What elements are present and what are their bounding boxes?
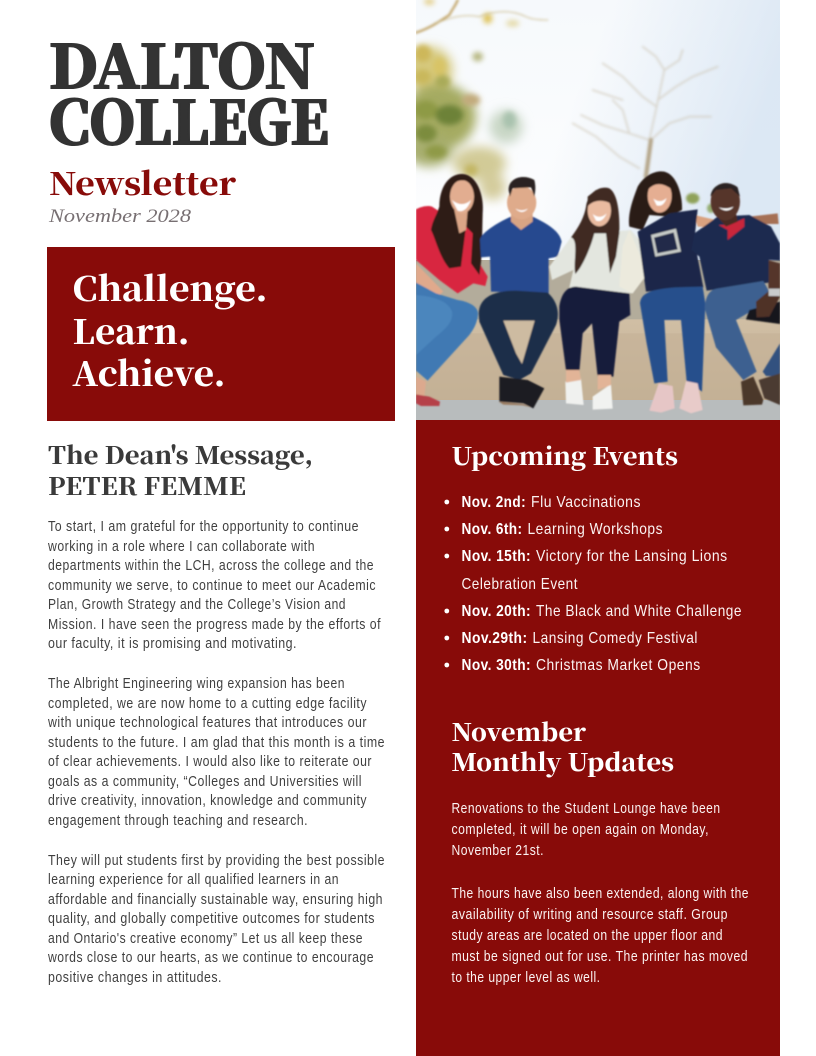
list: upcoming events: Learning Workshops [528,521,663,538]
text block: dean message paragraph 1: our faculty, it is promising and motivating. [48,636,297,652]
motto text [72,262,268,396]
text block: dean message paragraph 3: positive changes in attitudes. [48,970,222,986]
motto text: Challenge. [72,262,268,311]
panel: motto banner [47,247,395,421]
text block: dean message paragraph 1: Plan, Growth Strategy and the College’s Vision and [48,597,346,613]
list: upcoming events: Christmas Market Opens [536,657,701,674]
list: upcoming events: Victory for the Lansing Lions [536,548,728,565]
text block: dean message paragraph 2: students to the future. I am glad that this month is a time [48,735,385,751]
list: upcoming events: Lansing Comedy Festival [532,630,698,647]
text block: student lounge renovations [452,801,720,859]
motto text: Learn. [72,305,190,354]
text block: dean message paragraph 3: learning experience for all qualified learners in an [48,872,339,888]
text block: extended hours: study areas are located on the upper floor and [452,928,723,944]
text block: dean message paragraph 1: Mission. I have seen the progress made by the efforts of [48,617,381,633]
text block: dean message paragraph 1: community we serve, to continue to meet our Academic [48,578,376,594]
wall [416,260,780,420]
list: upcoming events: Nov.29th: [462,630,528,647]
text block: extended hours [452,886,749,986]
heading: November Monthly Updates: November [452,713,587,748]
list: upcoming events [444,494,742,674]
text block: extended hours: availability of writing and resource staff. Group [452,907,728,923]
text block: extended hours: to the upper level as well. [452,970,600,986]
title: Dalton College [49,20,329,161]
text block: dean message paragraph 3: and Ontario's creative economy” Let us all keep these [48,931,363,947]
list: upcoming events: Nov. 20th: [462,603,531,620]
heading: The Dean's Message [48,436,313,502]
text block: dean message paragraph 3: affordable and financially sustainable way, ensuring high [48,892,383,908]
person 4: woman in navy t-shirt [629,171,716,413]
subtitle: Newsletter: Newsletter [49,159,237,204]
text block: extended hours: must be signed out for use. The printer has moved [452,949,748,965]
text block: dean message paragraph 3: quality, and globally competitive outcomes for students [48,911,375,927]
motto text: Achieve. [72,347,226,396]
heading: November Monthly Updates: Monthly Updates [452,743,674,778]
text block: dean message paragraph 1: To start, I am grateful for the opportunity to continue [48,519,359,535]
list: upcoming events: The Black and White Challenge [536,603,742,620]
text block: student lounge renovations: November 21st. [452,843,544,859]
panel: red right column [416,420,780,1056]
text block: dean message paragraph 1 [47,519,381,652]
text block: dean message paragraph 3 [47,853,385,986]
text block: dean message paragraph 2 [47,676,385,829]
list: upcoming events: Nov. 15th: [462,548,531,565]
list: upcoming events: Celebration Event [462,576,578,593]
person 2: man in blue shirt [479,177,562,408]
text block: dean message paragraph 2: with unique technological features that introduces our [47,715,367,731]
title: Dalton College: COLLEGE [49,76,329,161]
list: upcoming events: Nov. 6th: [462,521,522,538]
photo: five smiling students sitting on a wall [403,0,780,420]
text block: dean message paragraph 2: completed, we are now home to a cutting edge facility [48,696,367,712]
heading: The Dean's Message: PETER FEMME [48,467,246,502]
heading: Upcoming Events: Upcoming Events [452,437,678,472]
text block: dean message paragraph 2: of clear achievements. I would also like to reiterate our [48,754,372,770]
text block: dean message paragraph 1: departments within the LCH, across the college and the [48,558,374,574]
text block: dean message paragraph 2: drive creativity, innovation, knowledge and community [48,793,367,809]
date: November 2028: November 2028 [48,206,192,227]
list: upcoming events: Nov. 30th: [462,657,531,674]
person 3: woman in white shirt [549,188,648,410]
text block: dean message paragraph 2: goals as a community, “Colleges and Universities will [48,774,362,790]
text block: student lounge renovations: completed, it will be open again on Monday, [452,822,709,838]
list: upcoming events: Nov. 2nd: [462,494,526,511]
text block: dean message paragraph 3: They will put students first by providing the best possible [48,853,385,869]
text block: dean message paragraph 1: working in a role where I can collaborate with [47,539,315,555]
text block: dean message paragraph 2: engagement through teaching and research. [48,813,308,829]
heading: The Dean's Message: The Dean's Message, [48,436,313,471]
text block: dean message paragraph 2: The Albright Engineering wing expansion has been [48,676,345,692]
title: Dalton College: DALTON [49,20,315,105]
person 1: woman in red shirt [416,174,488,406]
list: upcoming events: Flu Vaccinations [531,494,641,511]
text block: student lounge renovations: Renovations to the Student Lounge have been [452,801,720,817]
text block: dean message paragraph 3: words close to our hearts, as we continue to encourage [47,950,374,966]
person 5: man in navy polo [691,183,780,405]
text block: extended hours: The hours have also been extended, along with the [452,886,749,902]
heading: November Monthly Updates [452,713,674,778]
